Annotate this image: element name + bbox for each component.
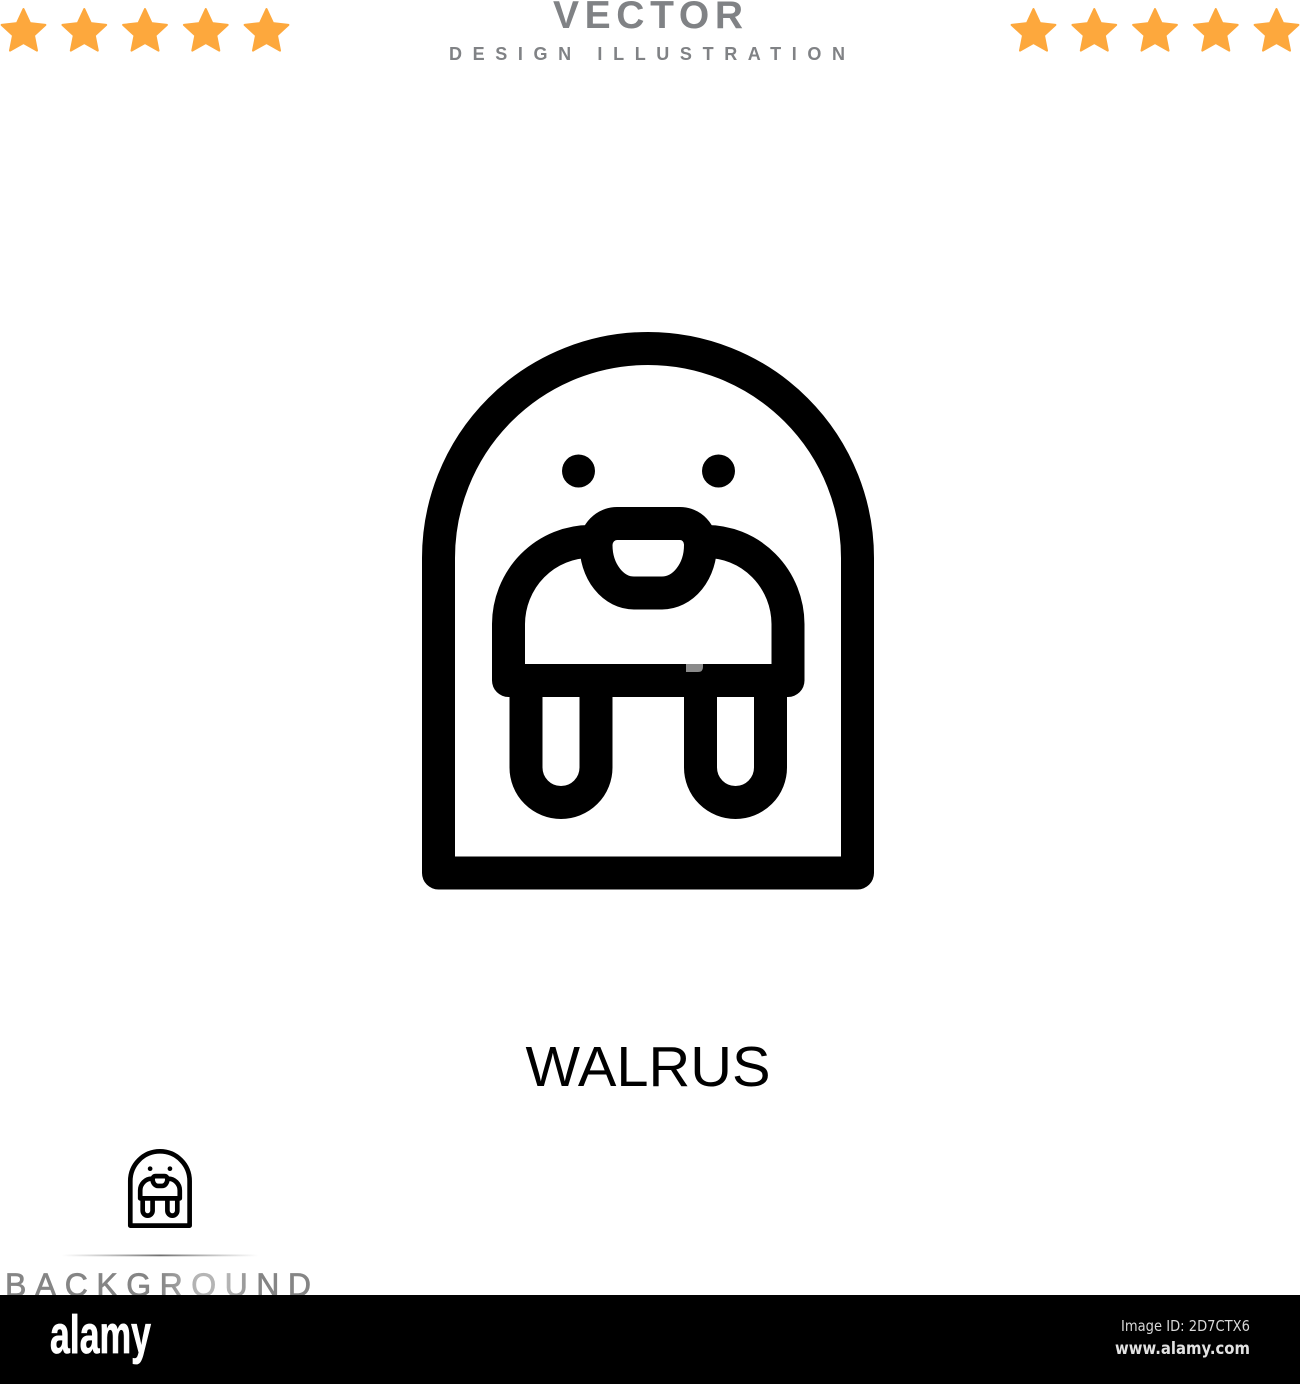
icon part: arch outline bbox=[438, 349, 858, 873]
label: BACKGROUND: BACKGROUND bbox=[5, 1267, 311, 1303]
icon part: left tusk bbox=[526, 690, 596, 802]
icon: walrus bbox=[438, 349, 858, 873]
title: WALRUS: WALRUS bbox=[526, 1035, 770, 1099]
icon part: right tusk bbox=[700, 690, 770, 802]
website: www.alamy.com bbox=[1115, 1339, 1250, 1359]
icon part: muzzle bbox=[596, 524, 701, 593]
image id: Image ID: 2D7CTX6 bbox=[1121, 1317, 1250, 1335]
footer bar bbox=[0, 1295, 1300, 1384]
rating stars: left bbox=[2, 9, 288, 51]
icon part: grey notch bbox=[686, 664, 703, 672]
rating stars: right bbox=[1012, 9, 1298, 51]
subheading: DESIGN ILLUSTRATION: DESIGN ILLUSTRATION bbox=[449, 44, 845, 64]
small walrus icon bbox=[130, 1151, 190, 1226]
footer background bbox=[0, 1295, 1300, 1384]
icon part: body bbox=[508, 541, 788, 680]
logo: alamy: alamy bbox=[50, 1305, 151, 1365]
icon part: left eye bbox=[562, 454, 595, 488]
icon part: right eye bbox=[702, 454, 735, 488]
